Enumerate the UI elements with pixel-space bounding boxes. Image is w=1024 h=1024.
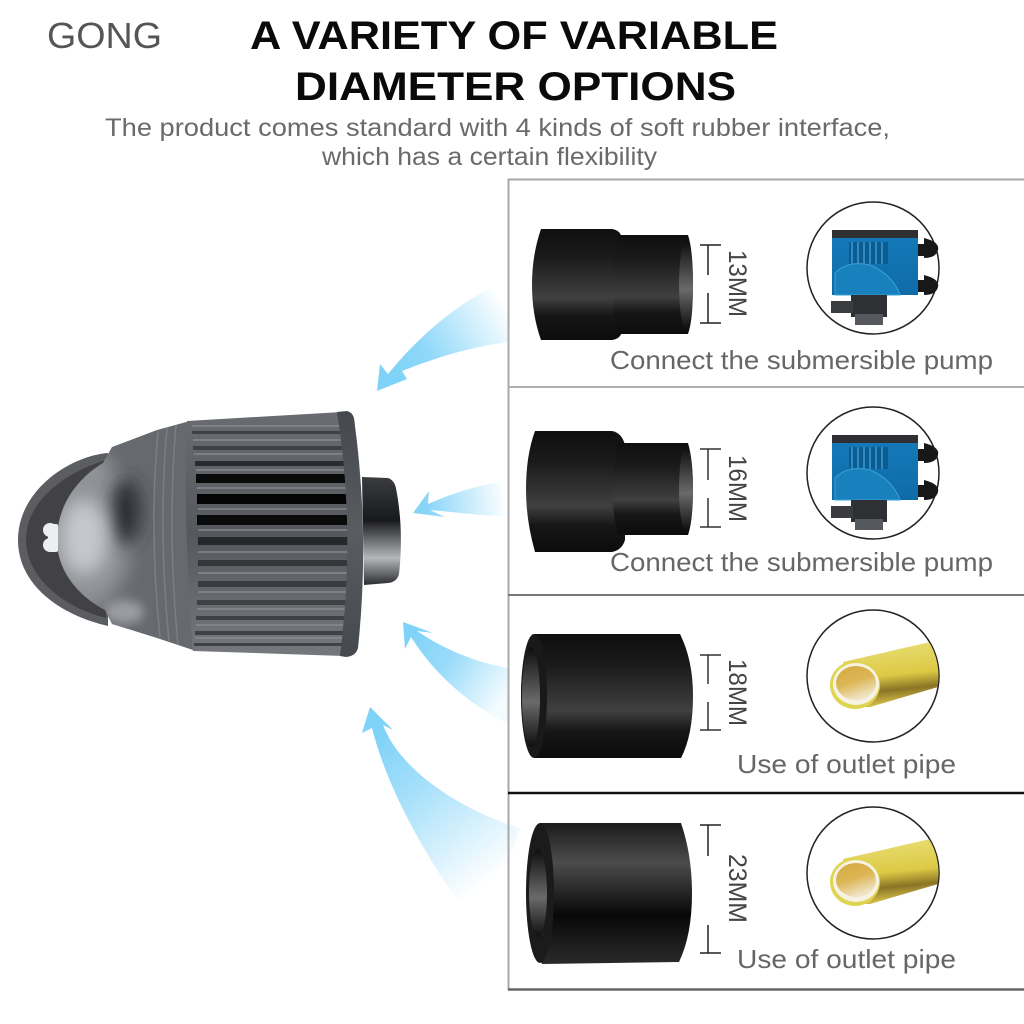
title: A VARIETY OF VARIABLE (250, 14, 778, 58)
dimension 16MM (700, 449, 751, 527)
dimension 23MM: 23MM (723, 854, 751, 923)
caption: Connect the submersible pump (610, 345, 993, 375)
outlet nozzle (362, 477, 401, 585)
caption: Use of outlet pipe (737, 749, 956, 779)
ball and cone housing (58, 422, 193, 650)
arrow: to nozzle from 13MM adapter (377, 280, 508, 391)
dome shell (18, 453, 108, 626)
dimension 16MM: 16MM (723, 455, 751, 522)
rubber adapter 23MM (526, 823, 692, 964)
icon: submersible pump (807, 202, 939, 334)
flange rim (337, 411, 363, 657)
caption: Connect the submersible pump (610, 547, 993, 577)
dimension 13MM (700, 245, 751, 323)
caption: Use of outlet pipe (737, 944, 956, 974)
panel: 18MM adapter (521, 610, 956, 779)
arrow: to nozzle from 18MM adapter (403, 622, 508, 724)
rubber adapter 16MM (526, 431, 693, 552)
brand label: GONG (47, 15, 162, 56)
subtitle: The product comes standard with 4 kinds of soft rubber interface, (105, 114, 890, 142)
panel: 16MM adapter (526, 407, 993, 577)
ribbed body (186, 412, 356, 656)
panel: 23MM adapter (526, 807, 956, 974)
title: DIAMETER OPTIONS (295, 65, 736, 109)
icon: yellow outlet pipe (807, 807, 945, 939)
panel: 13MM adapter (532, 202, 993, 375)
panel frame (508, 180, 1024, 990)
subtitle (105, 114, 890, 171)
icon: submersible pump (807, 407, 939, 539)
dimension 18MM (700, 655, 751, 730)
white pivot (43, 523, 58, 552)
arrow: to nozzle from 16MM adapter (413, 480, 508, 517)
arrow: to nozzle from 23MM adapter (362, 707, 520, 937)
dimension 23MM (700, 825, 751, 953)
product: wavemaker nozzle (18, 411, 401, 657)
title (250, 14, 778, 109)
subtitle: which has a certain flexibility (321, 143, 658, 171)
icon: yellow outlet pipe (807, 610, 945, 742)
rubber adapter 13MM (532, 229, 693, 340)
dimension 13MM: 13MM (723, 250, 751, 317)
collar rings (154, 425, 178, 645)
rubber adapter 18MM (521, 634, 693, 758)
dimension 18MM: 18MM (723, 659, 751, 726)
